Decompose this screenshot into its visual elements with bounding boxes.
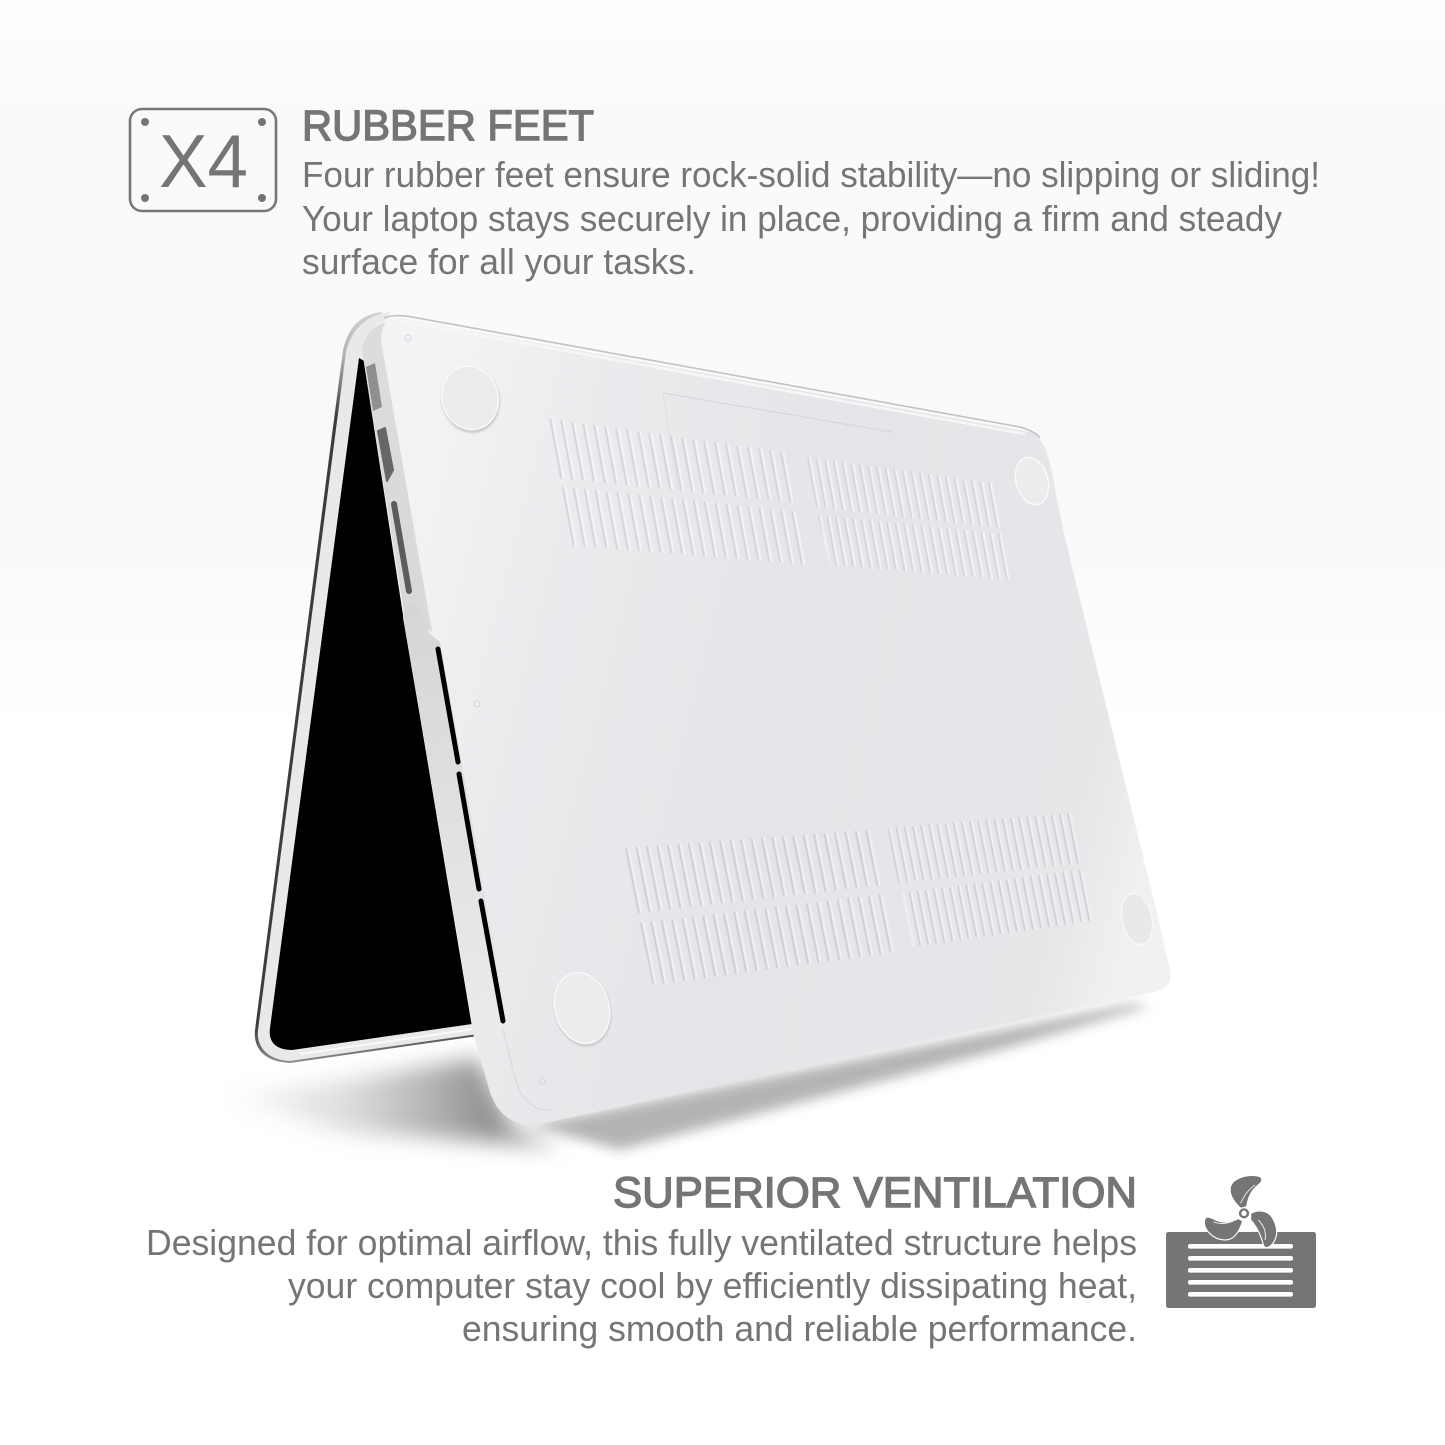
rubber foot: bottom right (1117, 890, 1157, 948)
icon: fan over vent (1166, 1176, 1316, 1308)
faint moulded details (405, 335, 892, 1084)
top edge highlight (384, 316, 1040, 438)
lower side band with vent slots (403, 603, 508, 1040)
vent slots: top group (544, 418, 1015, 580)
heading: superior ventilation: SUPERIOR VENTILATION (613, 1169, 1137, 1217)
laptop lid rim (255, 312, 478, 1063)
upper side band with ports (362, 322, 432, 632)
vent slots: bottom group (625, 813, 1097, 985)
rubber foot: bottom left (546, 966, 619, 1053)
laptop with clear hard shell case (230, 312, 1170, 1150)
text block: rubber feet description: Four rubber feet ensure rock-solid stability—no slipping or sliding! (302, 154, 1320, 195)
text block: ventilation description: ensuring smooth and reliable performance. (462, 1308, 1137, 1349)
text block: ventilation description: your computer stay cool by efficiently dissipating heat, (288, 1265, 1137, 1306)
rubber foot: top right (1010, 454, 1054, 508)
rubber foot: top left (434, 360, 507, 439)
text block: rubber feet description: surface for all your tasks. (302, 241, 696, 282)
text block: ventilation description (146, 1222, 1137, 1349)
icon: four rubber feet badge: X4 (159, 119, 248, 203)
icon: four rubber feet badge (130, 109, 276, 211)
inner case contour (503, 1030, 552, 1110)
heading: rubber feet: RUBBER FEET (302, 102, 594, 150)
laptop screen (270, 358, 472, 1050)
case bottom shell (362, 318, 1170, 1125)
text block: ventilation description: Designed for optimal airflow, this fully ventilated structure helps (146, 1222, 1137, 1263)
text block: rubber feet description (302, 154, 1320, 282)
text block: rubber feet description: Your laptop stays securely in place, providing a firm and steady (302, 198, 1282, 239)
shadow under laptop (230, 1004, 1150, 1150)
